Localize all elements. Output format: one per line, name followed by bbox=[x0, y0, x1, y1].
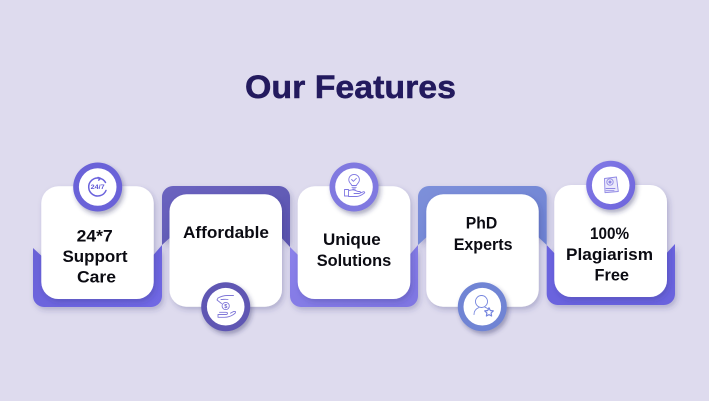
card text: PhD Experts bbox=[454, 215, 512, 254]
icon badge: hands with dollar coin bbox=[201, 282, 250, 331]
card text: 100% Plagiarism Free: Plagiarism bbox=[566, 246, 653, 264]
card: Affordable bbox=[170, 194, 282, 307]
card: 100% Plagiarism Free bbox=[554, 185, 667, 297]
icon badge: document with stamp bbox=[586, 161, 635, 210]
card text: 24*7 Support Care: 24*7 bbox=[77, 228, 113, 246]
backing shape: step 2 bbox=[162, 186, 290, 247]
card: PhD Experts bbox=[426, 194, 539, 307]
card text: 100% Plagiarism Free bbox=[566, 225, 653, 285]
card text: Unique Solutions bbox=[317, 231, 391, 270]
card text: Unique Solutions: Unique bbox=[323, 231, 381, 249]
card: Unique Solutions bbox=[298, 186, 410, 299]
backing shape: step 5 bbox=[547, 244, 675, 305]
card text: 24*7 Support Care: Support bbox=[62, 248, 128, 266]
card: 24*7 Support Care bbox=[41, 186, 154, 299]
card text: Unique Solutions: Solutions bbox=[317, 252, 391, 270]
backing shape: step 4 bbox=[418, 186, 547, 245]
icon badge: hands with dollar coin: $ bbox=[224, 304, 228, 310]
card text: Affordable: Affordable bbox=[183, 224, 269, 242]
icon badge: person with star bbox=[458, 282, 507, 331]
icon badge: hand with lightbulb bbox=[330, 162, 378, 212]
card text: 100% Plagiarism Free: 100% bbox=[590, 225, 629, 243]
backing shape: step 3 bbox=[290, 245, 418, 307]
card text: 24*7 Support Care: Care bbox=[77, 269, 116, 287]
card text: PhD Experts: PhD bbox=[466, 215, 497, 233]
title: Our Features bbox=[245, 69, 456, 105]
card text: 24*7 Support Care bbox=[62, 228, 128, 287]
card text: 100% Plagiarism Free: Free bbox=[594, 267, 629, 285]
card text: PhD Experts: Experts bbox=[454, 236, 512, 254]
icon badge: 24/7 clock bbox=[73, 162, 122, 212]
icon badge: 24/7 clock: 24/7 bbox=[91, 184, 105, 191]
backing shape: step 1 bbox=[33, 245, 162, 307]
